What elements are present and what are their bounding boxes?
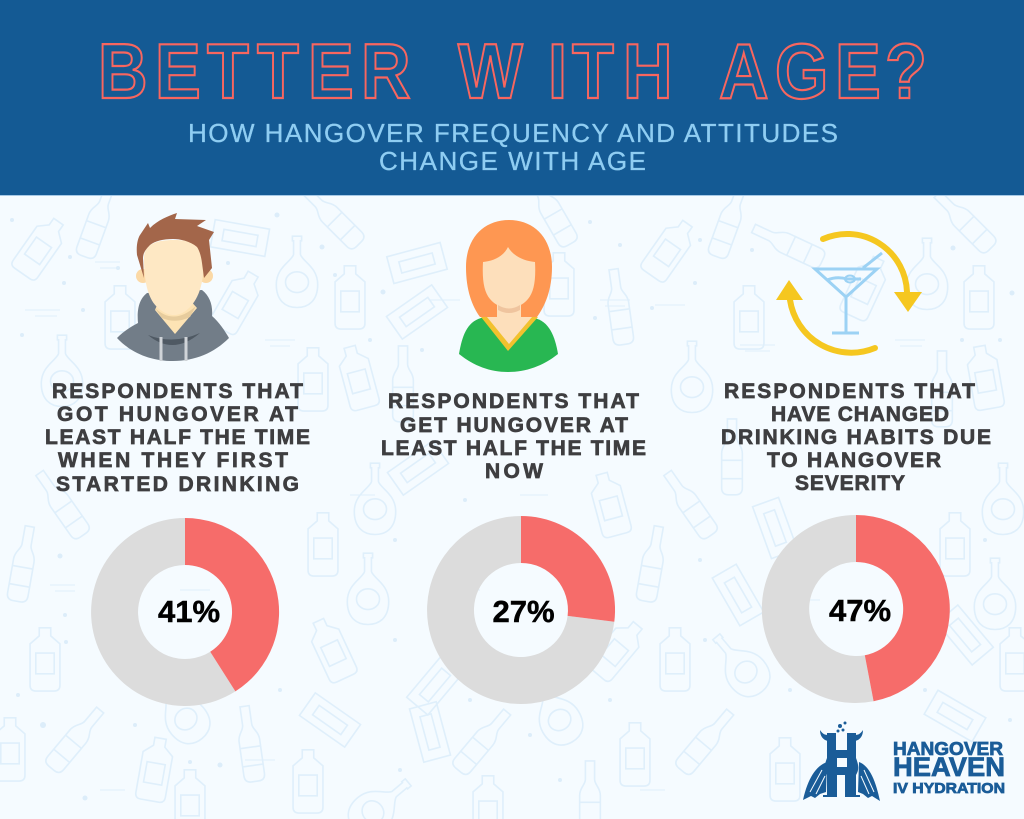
heading: column 1: WHEN THEY FIRST xyxy=(58,449,288,472)
heading: column 1 xyxy=(45,380,310,496)
heading: column 3: HAVE CHANGED xyxy=(771,403,949,426)
heading: column 2: NOW xyxy=(485,460,543,483)
heading: column 1: RESPONDENTS THAT xyxy=(52,380,303,403)
icon: man in hoodie xyxy=(117,213,229,361)
icon: cocktail with cycle arrows xyxy=(776,234,922,353)
heading: column 3: TO HANGOVER xyxy=(767,449,941,472)
heading: column 1: LEAST HALF THE TIME xyxy=(45,426,310,449)
background dots xyxy=(10,212,1014,800)
value label: 41% xyxy=(158,594,220,629)
donut chart: 27% xyxy=(427,516,615,704)
heading: column 2: RESPONDENTS THAT xyxy=(388,390,639,413)
title: BETTER WITH AGE? xyxy=(98,27,927,115)
subtitle: HOW HANGOVER FREQUENCY AND ATTITUDES xyxy=(188,118,838,148)
subtitle: CHANGE WITH AGE xyxy=(379,146,646,176)
value label: 27% xyxy=(492,594,555,629)
heading: column 2: GET HUNGOVER AT xyxy=(400,414,628,437)
logo icon: winged H xyxy=(803,722,880,801)
heading: column 3: RESPONDENTS THAT xyxy=(724,380,975,403)
heading: column 3: SEVERITY xyxy=(795,472,905,495)
donut chart: 41% xyxy=(91,518,279,706)
donut chart: 47% xyxy=(762,515,950,703)
heading: column 1: STARTED DRINKING xyxy=(56,473,299,496)
logo: Hangover Heaven xyxy=(803,722,1005,801)
heading: column 2: LEAST HALF THE TIME xyxy=(381,437,646,460)
logo wordmark: HANGOVER xyxy=(893,739,1003,759)
icon: woman with green top xyxy=(459,220,558,372)
heading: column 3 xyxy=(721,380,991,495)
header band xyxy=(0,0,1024,196)
heading: column 3: DRINKING HABITS DUE xyxy=(721,426,991,449)
heading: column 1: GOT HUNGOVER AT xyxy=(57,403,298,426)
value label: 47% xyxy=(829,593,891,628)
subtitle xyxy=(188,118,838,176)
heading: column 2 xyxy=(381,390,646,483)
logo wordmark: HEAVEN xyxy=(893,752,1005,782)
background bottle pattern xyxy=(0,173,1024,819)
logo wordmark xyxy=(893,739,1005,797)
logo wordmark: IV HYDRATION xyxy=(893,780,1005,797)
